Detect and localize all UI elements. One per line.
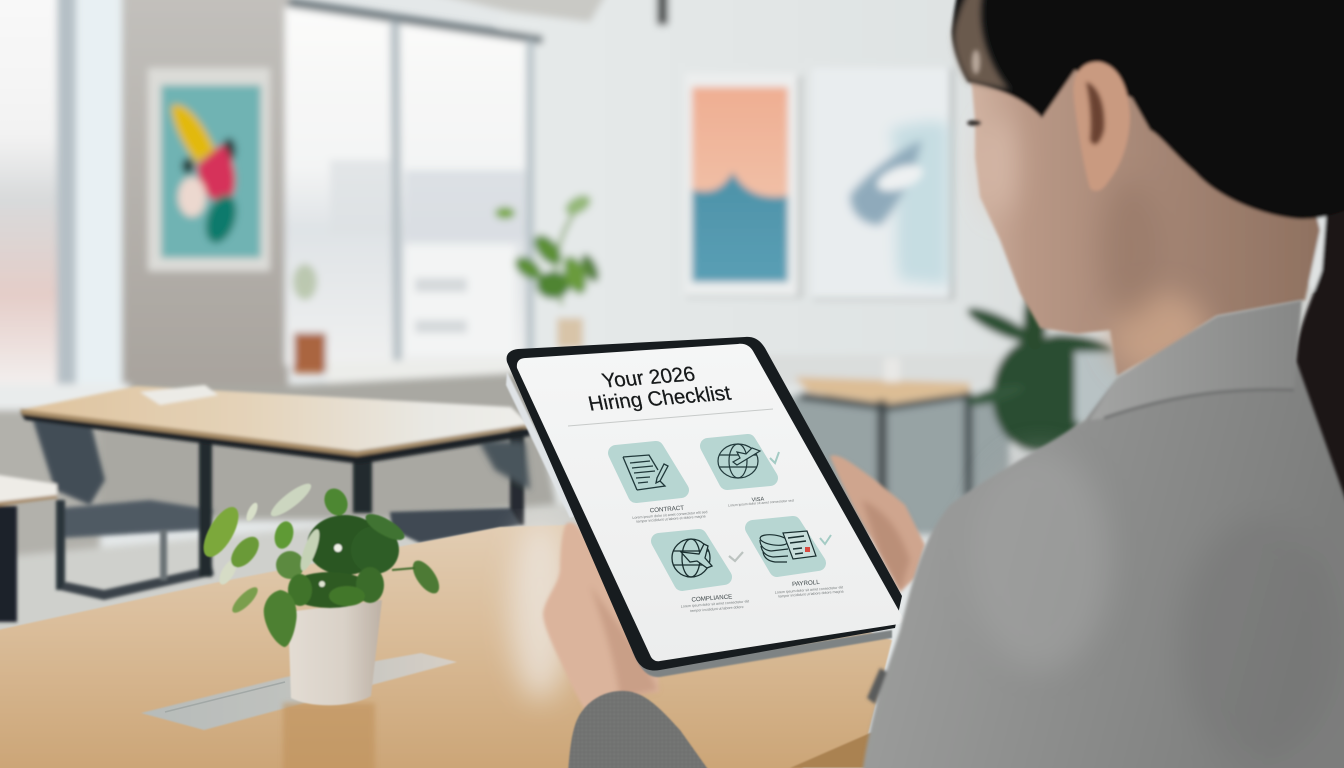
- desk leg: [510, 425, 524, 525]
- bangs highlight: [953, 0, 1010, 90]
- right lower wall: [790, 395, 1010, 535]
- dark teal shape: [200, 191, 242, 247]
- chair seat: [60, 500, 214, 538]
- leaf: [1023, 290, 1047, 350]
- line: tempor incididunt ut labore dolore magna: [778, 589, 844, 599]
- highlight spots: [319, 581, 325, 587]
- document lines: [630, 461, 655, 483]
- pale central leaf: [297, 527, 323, 573]
- leaf: [495, 207, 515, 219]
- top leaf: [320, 485, 352, 519]
- leaf: [559, 253, 591, 297]
- black shape: [222, 138, 236, 162]
- document outline: [623, 455, 665, 490]
- left hand shadow: [590, 585, 658, 698]
- small desk leg: [0, 506, 17, 622]
- narrow leaf: [229, 584, 261, 616]
- leaf: [1044, 330, 1116, 360]
- globe: [718, 444, 758, 478]
- right desk rail: [800, 392, 972, 411]
- base foliage: [992, 337, 1088, 453]
- green leaf middle: [226, 532, 264, 572]
- leaf: [511, 252, 545, 284]
- hair mass: [952, 0, 1344, 219]
- title line one: Your 2026: [600, 363, 697, 393]
- poster shadow: [686, 76, 802, 298]
- person: grey jacket: [862, 300, 1344, 768]
- jacket light patch: [970, 450, 1110, 670]
- collar: [1090, 300, 1302, 420]
- right hand shadow: [862, 500, 910, 592]
- desk leg: [199, 437, 212, 577]
- blurred buildings: [330, 160, 390, 235]
- header divider: [568, 409, 773, 426]
- slab groove: [165, 682, 285, 712]
- payroll card: [753, 524, 844, 599]
- dark leaf clusters: [307, 515, 383, 575]
- pot: [557, 318, 583, 348]
- terracotta pot: [294, 333, 326, 373]
- black shape: [182, 158, 194, 174]
- poster frame: [148, 68, 270, 271]
- label: PAYROLL: [792, 579, 820, 588]
- meridian: [682, 539, 700, 577]
- desk leg: [353, 448, 372, 513]
- pale small leaf: [244, 501, 260, 523]
- bright large leaf: [197, 502, 245, 562]
- chair strut: [160, 530, 167, 580]
- jacket shadow patch: [1180, 520, 1340, 760]
- floor: [0, 500, 600, 660]
- dark leaf clusters: [342, 517, 408, 583]
- leaf: [362, 509, 408, 545]
- object on right desk: [884, 358, 900, 382]
- card background: [659, 537, 724, 583]
- under ear shadow: [1100, 180, 1160, 320]
- building windows: [415, 278, 467, 292]
- wisp highlight: [874, 159, 926, 197]
- pale abstract poster: [812, 68, 954, 300]
- calculator sheet: [783, 531, 816, 559]
- poster frame: [812, 68, 950, 298]
- inner ear shadow: [1086, 82, 1104, 144]
- person: sleeve: [568, 691, 712, 768]
- desk top: [21, 386, 529, 451]
- dark leaf clusters: [356, 567, 384, 603]
- background plant right: [964, 290, 1116, 453]
- plane: [681, 544, 712, 568]
- cheek light: [984, 115, 1016, 215]
- wisp: [850, 140, 922, 225]
- neck light: [1112, 293, 1208, 377]
- chair back: [32, 417, 105, 505]
- shirt cuff detail: [867, 668, 887, 704]
- leaf: [964, 380, 1026, 410]
- left hand: [543, 522, 659, 716]
- check mark: [729, 552, 743, 561]
- coin stack edges: [760, 540, 788, 562]
- large lower leaf: [264, 590, 297, 647]
- blurred white building: [405, 245, 515, 355]
- collar fold shadow: [1104, 390, 1294, 418]
- latitude lines: [719, 455, 757, 467]
- ponytail: [1294, 190, 1344, 540]
- card background: [616, 449, 681, 495]
- second chair seat: [390, 508, 520, 543]
- table underside: [790, 730, 900, 768]
- line: tempor incididunt ut labore dolore: [690, 605, 744, 613]
- peach field: [692, 87, 788, 197]
- leaf: [536, 271, 570, 299]
- wall below sill: [0, 372, 560, 520]
- stem: [556, 198, 585, 305]
- title line two: Hiring Checklist: [586, 382, 733, 415]
- plane: [733, 448, 760, 465]
- red key: [805, 547, 810, 552]
- check mark: [770, 452, 779, 463]
- pale leaf lower: [216, 557, 240, 587]
- line: tempor incididunt ut labore et dolore magna: [636, 514, 706, 524]
- cream shape: [178, 177, 206, 217]
- meridian: [729, 444, 747, 478]
- building windows: [415, 320, 467, 333]
- wall poster colourful: [148, 68, 270, 271]
- pen: [656, 464, 668, 483]
- pale upper leaf: [267, 479, 315, 521]
- ceiling band: [340, 0, 620, 22]
- window right frame: [526, 40, 534, 370]
- pale glare: [510, 520, 570, 700]
- description text: Lorem ipsum dolor sit amet consectetur sed: [728, 498, 794, 508]
- mid green patch: [288, 574, 312, 606]
- pale band at pillar base: [0, 384, 130, 410]
- label: VISA: [751, 496, 765, 503]
- right desk: [795, 377, 970, 404]
- left window frame: [57, 0, 79, 390]
- right leaf: [408, 556, 444, 598]
- poster teal field: [161, 85, 261, 258]
- poster shadow: [813, 68, 954, 300]
- line: Lorem ipsum dolor sit amet consectetur elit: [681, 599, 749, 609]
- eye lash: [967, 120, 981, 126]
- grey object behind shoulder: [1075, 352, 1125, 422]
- person: hands behind tablet: [543, 455, 925, 716]
- far desk and chairs: [0, 385, 530, 622]
- papers on desk: [140, 385, 218, 405]
- yellow shape: [171, 105, 215, 163]
- tablet silver edge: [506, 372, 578, 518]
- orange and blue poster: [685, 73, 802, 298]
- visa card: [708, 442, 794, 508]
- tablet title: [586, 363, 733, 415]
- foliage: [197, 479, 444, 647]
- stem to right leaf: [392, 568, 415, 570]
- right desk leg: [964, 392, 973, 497]
- icon: globe and plane: [718, 444, 760, 478]
- right lower wall light: [740, 355, 1020, 385]
- right hand: [830, 455, 925, 592]
- table top: [0, 525, 892, 768]
- large window: [285, 6, 530, 365]
- grey wall: [122, 0, 288, 390]
- tablet metal lower edge: [632, 630, 892, 677]
- globe: [672, 539, 710, 577]
- icon: globe and plane: [672, 539, 712, 577]
- description text: [775, 585, 844, 599]
- ear: [1073, 62, 1130, 191]
- desk edge: [20, 409, 529, 456]
- description text: [681, 599, 749, 613]
- blue wave field: [692, 172, 788, 282]
- leaf: [562, 191, 594, 219]
- line: Lorem ipsum dolor sit amet consectetur elit: [775, 585, 843, 595]
- compliance card: [659, 537, 749, 613]
- label: CONTRACT: [649, 505, 685, 514]
- card background: [753, 524, 818, 569]
- left sleeve: [568, 691, 712, 768]
- icon: coins and calculator: [759, 531, 816, 562]
- foreground wooden table: [0, 520, 900, 768]
- window top frame: [288, 0, 543, 44]
- window mullion: [390, 20, 402, 362]
- sleeve weave: [568, 691, 712, 768]
- poster frame: [685, 73, 798, 296]
- pot reflection: [283, 703, 375, 768]
- leaf: [529, 230, 567, 270]
- contract card: [616, 449, 708, 524]
- check mark: [820, 535, 831, 544]
- coin stack: [759, 533, 789, 547]
- white pillar: [76, 0, 126, 390]
- tablet bezel: [507, 337, 902, 670]
- white pot: [288, 600, 382, 705]
- right desk leg: [877, 400, 887, 495]
- dark leaf clusters: [288, 572, 372, 608]
- windowsill: [322, 358, 530, 388]
- plant in white pot: [141, 479, 457, 768]
- cable tray slab: [141, 653, 457, 730]
- latitude lines: [673, 551, 709, 565]
- gap of light behind ponytail: [1298, 205, 1330, 295]
- window plant: [495, 191, 603, 348]
- description text: [632, 510, 708, 524]
- dark leaf clusters: [276, 551, 304, 579]
- ceiling camera fixture: [657, 0, 668, 25]
- red shape: [197, 144, 235, 200]
- person: head, neck, hair: [952, 0, 1344, 540]
- calculator lines: [788, 536, 806, 554]
- chair leg: [56, 500, 65, 590]
- desk underside rail: [20, 412, 530, 464]
- lower left wall: [0, 385, 100, 595]
- leaf: [964, 302, 1036, 348]
- card background: [708, 442, 770, 482]
- plant on windowsill left: [293, 264, 326, 373]
- left window: [0, 0, 60, 386]
- neck and face: [952, 30, 1320, 376]
- blurred buildings: [405, 170, 525, 240]
- pale blue wash: [890, 122, 948, 285]
- icon: document and pen: [623, 455, 668, 490]
- chair base: [60, 566, 214, 600]
- jacket body: [862, 302, 1344, 768]
- second chair back: [478, 440, 530, 490]
- bangs glint: [972, 50, 980, 74]
- leaf: [272, 519, 296, 551]
- right white wall: [500, 0, 1344, 570]
- foliage: [293, 264, 317, 300]
- label: COMPLIANCE: [691, 593, 733, 604]
- small desk edge: [0, 495, 57, 508]
- highlight spots: [334, 544, 342, 552]
- leaf: [577, 251, 603, 285]
- tablet device: [506, 337, 903, 677]
- line: Lorem ipsum dolor sit amet consectetur elit sed: [632, 510, 708, 520]
- small left desk: [0, 472, 57, 505]
- tablet screen: [517, 344, 903, 661]
- mid green patch: [329, 586, 365, 606]
